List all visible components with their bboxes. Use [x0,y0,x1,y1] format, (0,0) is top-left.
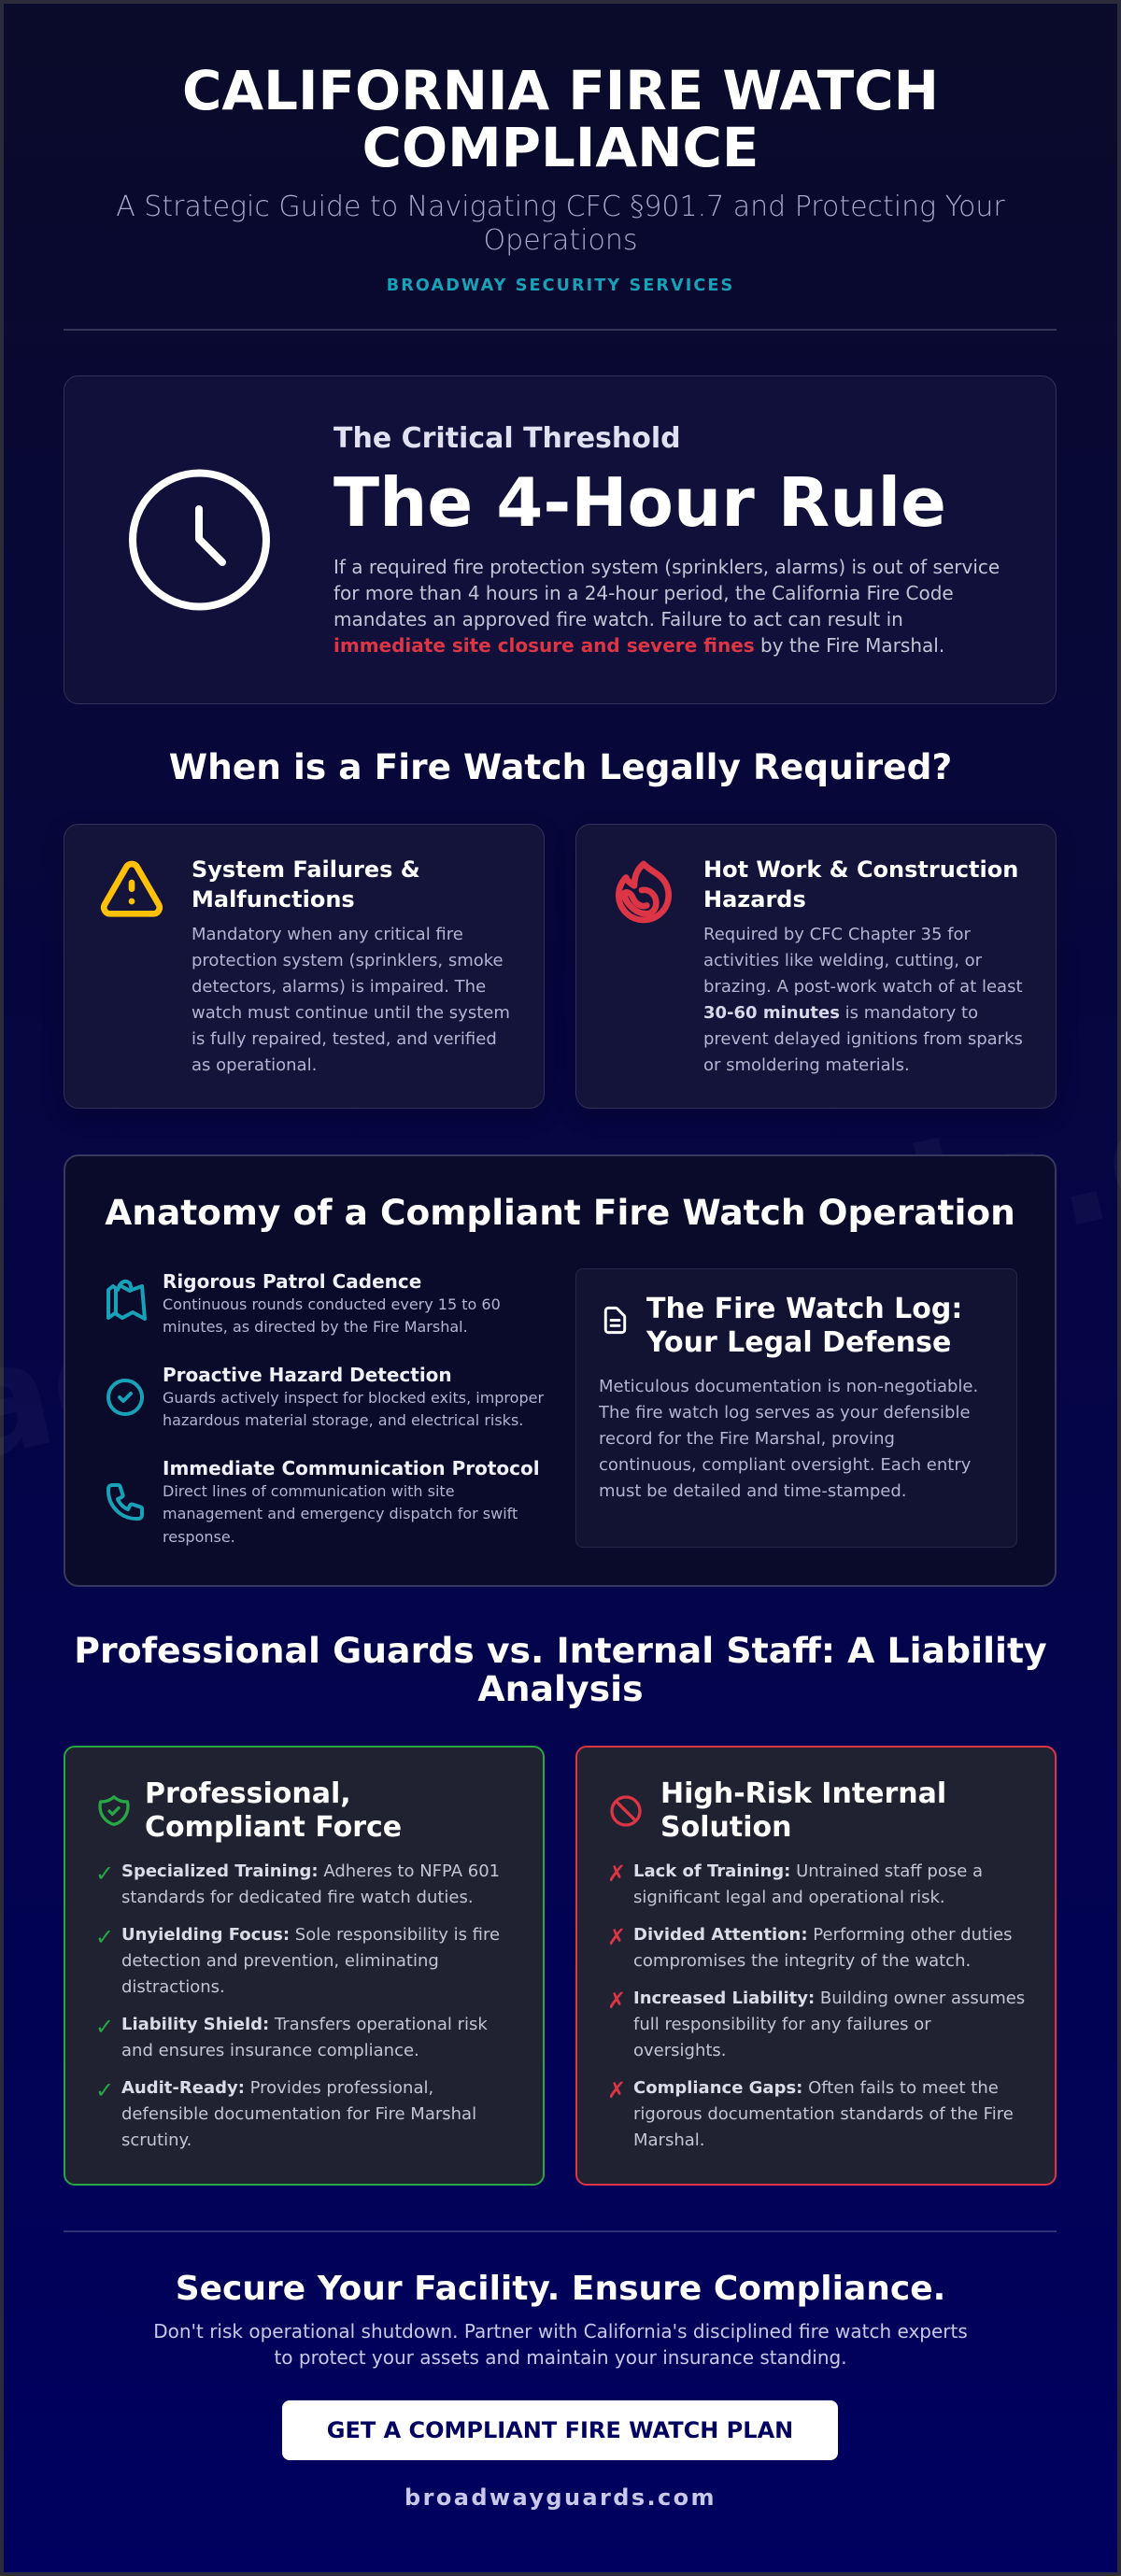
title: COMPLIANCE [362,116,759,179]
anatomy heading: Anatomy of a Compliant Fire Watch Operation [105,1192,1015,1233]
brand line: BROADWAY SECURITY SERVICES [387,276,734,295]
header [116,59,1005,295]
benefit list: ✓ [95,2014,114,2040]
card body: as operational. [192,1055,317,1075]
log heading [646,1293,962,1359]
icon: ban [610,1795,642,1827]
risk list: Increased Liability: Building owner assumes [633,1989,1025,2008]
risk list: oversights. [633,2041,727,2060]
log body [598,1377,978,1501]
risk list: full responsibility for any failures or [633,2015,931,2034]
hazard title: Proactive Hazard Detection [163,1364,452,1386]
CTA text: Don't risk operational shutdown. Partner with California's disciplined fire watch experts [153,2320,968,2342]
communication text [163,1482,518,1546]
card heading: System Failures & [192,856,420,883]
icon: map [106,1280,147,1321]
card body [192,925,510,1075]
column heading [660,1777,946,1844]
title [182,59,939,179]
log heading: The Fire Watch Log: [646,1293,962,1325]
hero heading: The 4-Hour Rule [333,463,946,542]
hero body: mandates an approved fire watch. Failure to act can result in [333,608,903,630]
panel: anatomy [64,1154,1057,1587]
CTA text: to protect your assets and maintain your insurance standing. [274,2346,847,2369]
card heading [192,856,420,913]
panel: 4-hour rule [64,375,1057,704]
benefit list: Audit-Ready: Provides professional, [121,2078,433,2098]
card body [703,925,1023,1075]
panel: fire watch log [575,1268,1017,1548]
benefit list [95,1861,500,2150]
communication text: management and emergency dispatch for swift [163,1505,518,1522]
panel: system failures [64,824,545,1109]
subtitle [116,191,1005,257]
column heading: Professional, [145,1777,351,1810]
icon: check circle [106,1379,144,1416]
card heading: Hazards [703,886,806,913]
card body: is fully repaired, tested, and verified [192,1029,497,1049]
card body: detectors, alarms) is impaired. The [192,977,486,997]
risk list: Lack of Training: Untrained staff pose a [633,1861,983,1881]
icon: shield [98,1795,130,1826]
card body: or smoldering materials. [703,1055,910,1075]
communication text: Direct lines of communication with site [163,1482,455,1500]
card body: protection system (sprinklers, smoke [192,951,504,970]
risk list: significant legal and operational risk. [633,1888,945,1907]
icon: warning [101,861,163,917]
benefit list: Specialized Training: Adheres to NFPA 601 [121,1861,500,1881]
hero body: for more than 4 hours in a 24-hour period, the California Fire Code [333,582,954,604]
patrol text [163,1295,501,1336]
card heading: Malfunctions [192,886,355,913]
section heading: comparison: Professional Guards vs. Internal Staff: A Liability [74,1630,1047,1671]
benefit list: Liability Shield: Transfers operational risk [121,2015,488,2034]
benefit list: Unyielding Focus: Sole responsibility is fire [121,1925,500,1945]
risk list: ✗ [607,1861,626,1887]
log body: Meticulous documentation is non-negotiable. [599,1377,978,1396]
hero body: immediate site closure and severe fines by the Fire Marshal. [333,634,944,657]
icon: fire [616,861,672,923]
column heading: Solution [660,1811,791,1844]
card heading [703,856,1018,913]
panel: professional force [64,1746,545,2186]
risk list: Marshal. [633,2130,704,2150]
CTA heading: Secure Your Facility. Ensure Compliance. [176,2270,945,2308]
column heading: Compliant Force [145,1811,402,1844]
benefit list: ✓ [95,2077,114,2103]
log body: The fire watch log serves as your defensible [599,1403,971,1422]
icon: clock [129,469,270,611]
call to action [153,2270,968,2511]
hero kicker: The Critical Threshold [333,422,681,455]
hazard text [163,1389,544,1429]
hero body [333,556,1000,657]
risk list [607,1861,1025,2150]
card body: activities like welding, cutting, or [703,951,982,970]
risk list: ✗ [607,1988,626,2014]
card body: prevent delayed ignitions from sparks [703,1029,1023,1049]
benefit list: detection and prevention, eliminating [121,1951,439,1971]
risk list: rigorous documentation standards of the Fire [633,2104,1014,2124]
communication text: response. [163,1528,235,1546]
CTA button [282,2400,838,2460]
benefit list: defensible documentation for Fire Marshal [121,2104,476,2124]
icon: document [603,1306,626,1334]
section heading: when required: When is a Fire Watch Legally Required? [169,746,952,787]
panel: internal solution [575,1746,1057,2186]
benefit list: standards for dedicated fire watch duties. [121,1888,474,1907]
hazard text: Guards actively inspect for blocked exits, improper [163,1389,544,1407]
subtitle: Operations [484,224,637,257]
communication title: Immediate Communication Protocol [163,1457,540,1479]
hero body: If a required fire protection system (sprinklers, alarms) is out of service [333,556,1000,578]
card body: Required by CFC Chapter 35 for [703,925,971,944]
card body: watch must continue until the system [192,1003,510,1023]
column heading [145,1777,402,1844]
benefit list: distractions. [121,1977,225,1997]
log body: continuous, compliant oversight. Each entry [599,1455,971,1475]
risk list: compromises the integrity of the watch. [633,1951,971,1971]
card body: Mandatory when any critical fire [192,925,463,944]
risk list: Compliance Gaps: Often fails to meet the [633,2078,999,2098]
risk list: ✗ [607,2077,626,2103]
benefit list: and ensures insurance compliance. [121,2041,419,2060]
CTA button: GET A COMPLIANT FIRE WATCH PLAN [327,2417,793,2443]
log body: must be detailed and time-stamped. [599,1481,907,1501]
section heading: comparison [74,1630,1047,1709]
benefit list: ✓ [95,1861,114,1887]
benefit list: ✓ [95,1924,114,1950]
CTA text [153,2320,968,2369]
column heading: High-Risk Internal [660,1777,946,1810]
title: CALIFORNIA FIRE WATCH [182,59,939,122]
subtitle: A Strategic Guide to Navigating CFC §901.7 and Protecting Your [116,191,1005,223]
icon: phone [106,1483,144,1521]
patrol text: Continuous rounds conducted every 15 to 60 [163,1295,501,1313]
risk list: ✗ [607,1924,626,1950]
card heading: Hot Work & Construction [703,856,1018,883]
risk list: Divided Attention: Performing other duties [633,1925,1013,1945]
patrol title: Rigorous Patrol Cadence [163,1270,421,1293]
log body: record for the Fire Marshal, proving [599,1429,895,1449]
log heading: Your Legal Defense [646,1326,951,1359]
patrol text: minutes, as directed by the Fire Marshal. [163,1318,468,1336]
panel: hot work [575,824,1057,1109]
benefit list: scrutiny. [121,2130,192,2150]
card body: 30-60 minutes is mandatory to [703,1003,978,1023]
website: broadwayguards.com [404,2484,717,2511]
hazard text: hazardous material storage, and electrical risks. [163,1411,523,1429]
card body: brazing. A post-work watch of at least [703,977,1023,997]
section heading: comparison: Analysis [477,1668,644,1709]
